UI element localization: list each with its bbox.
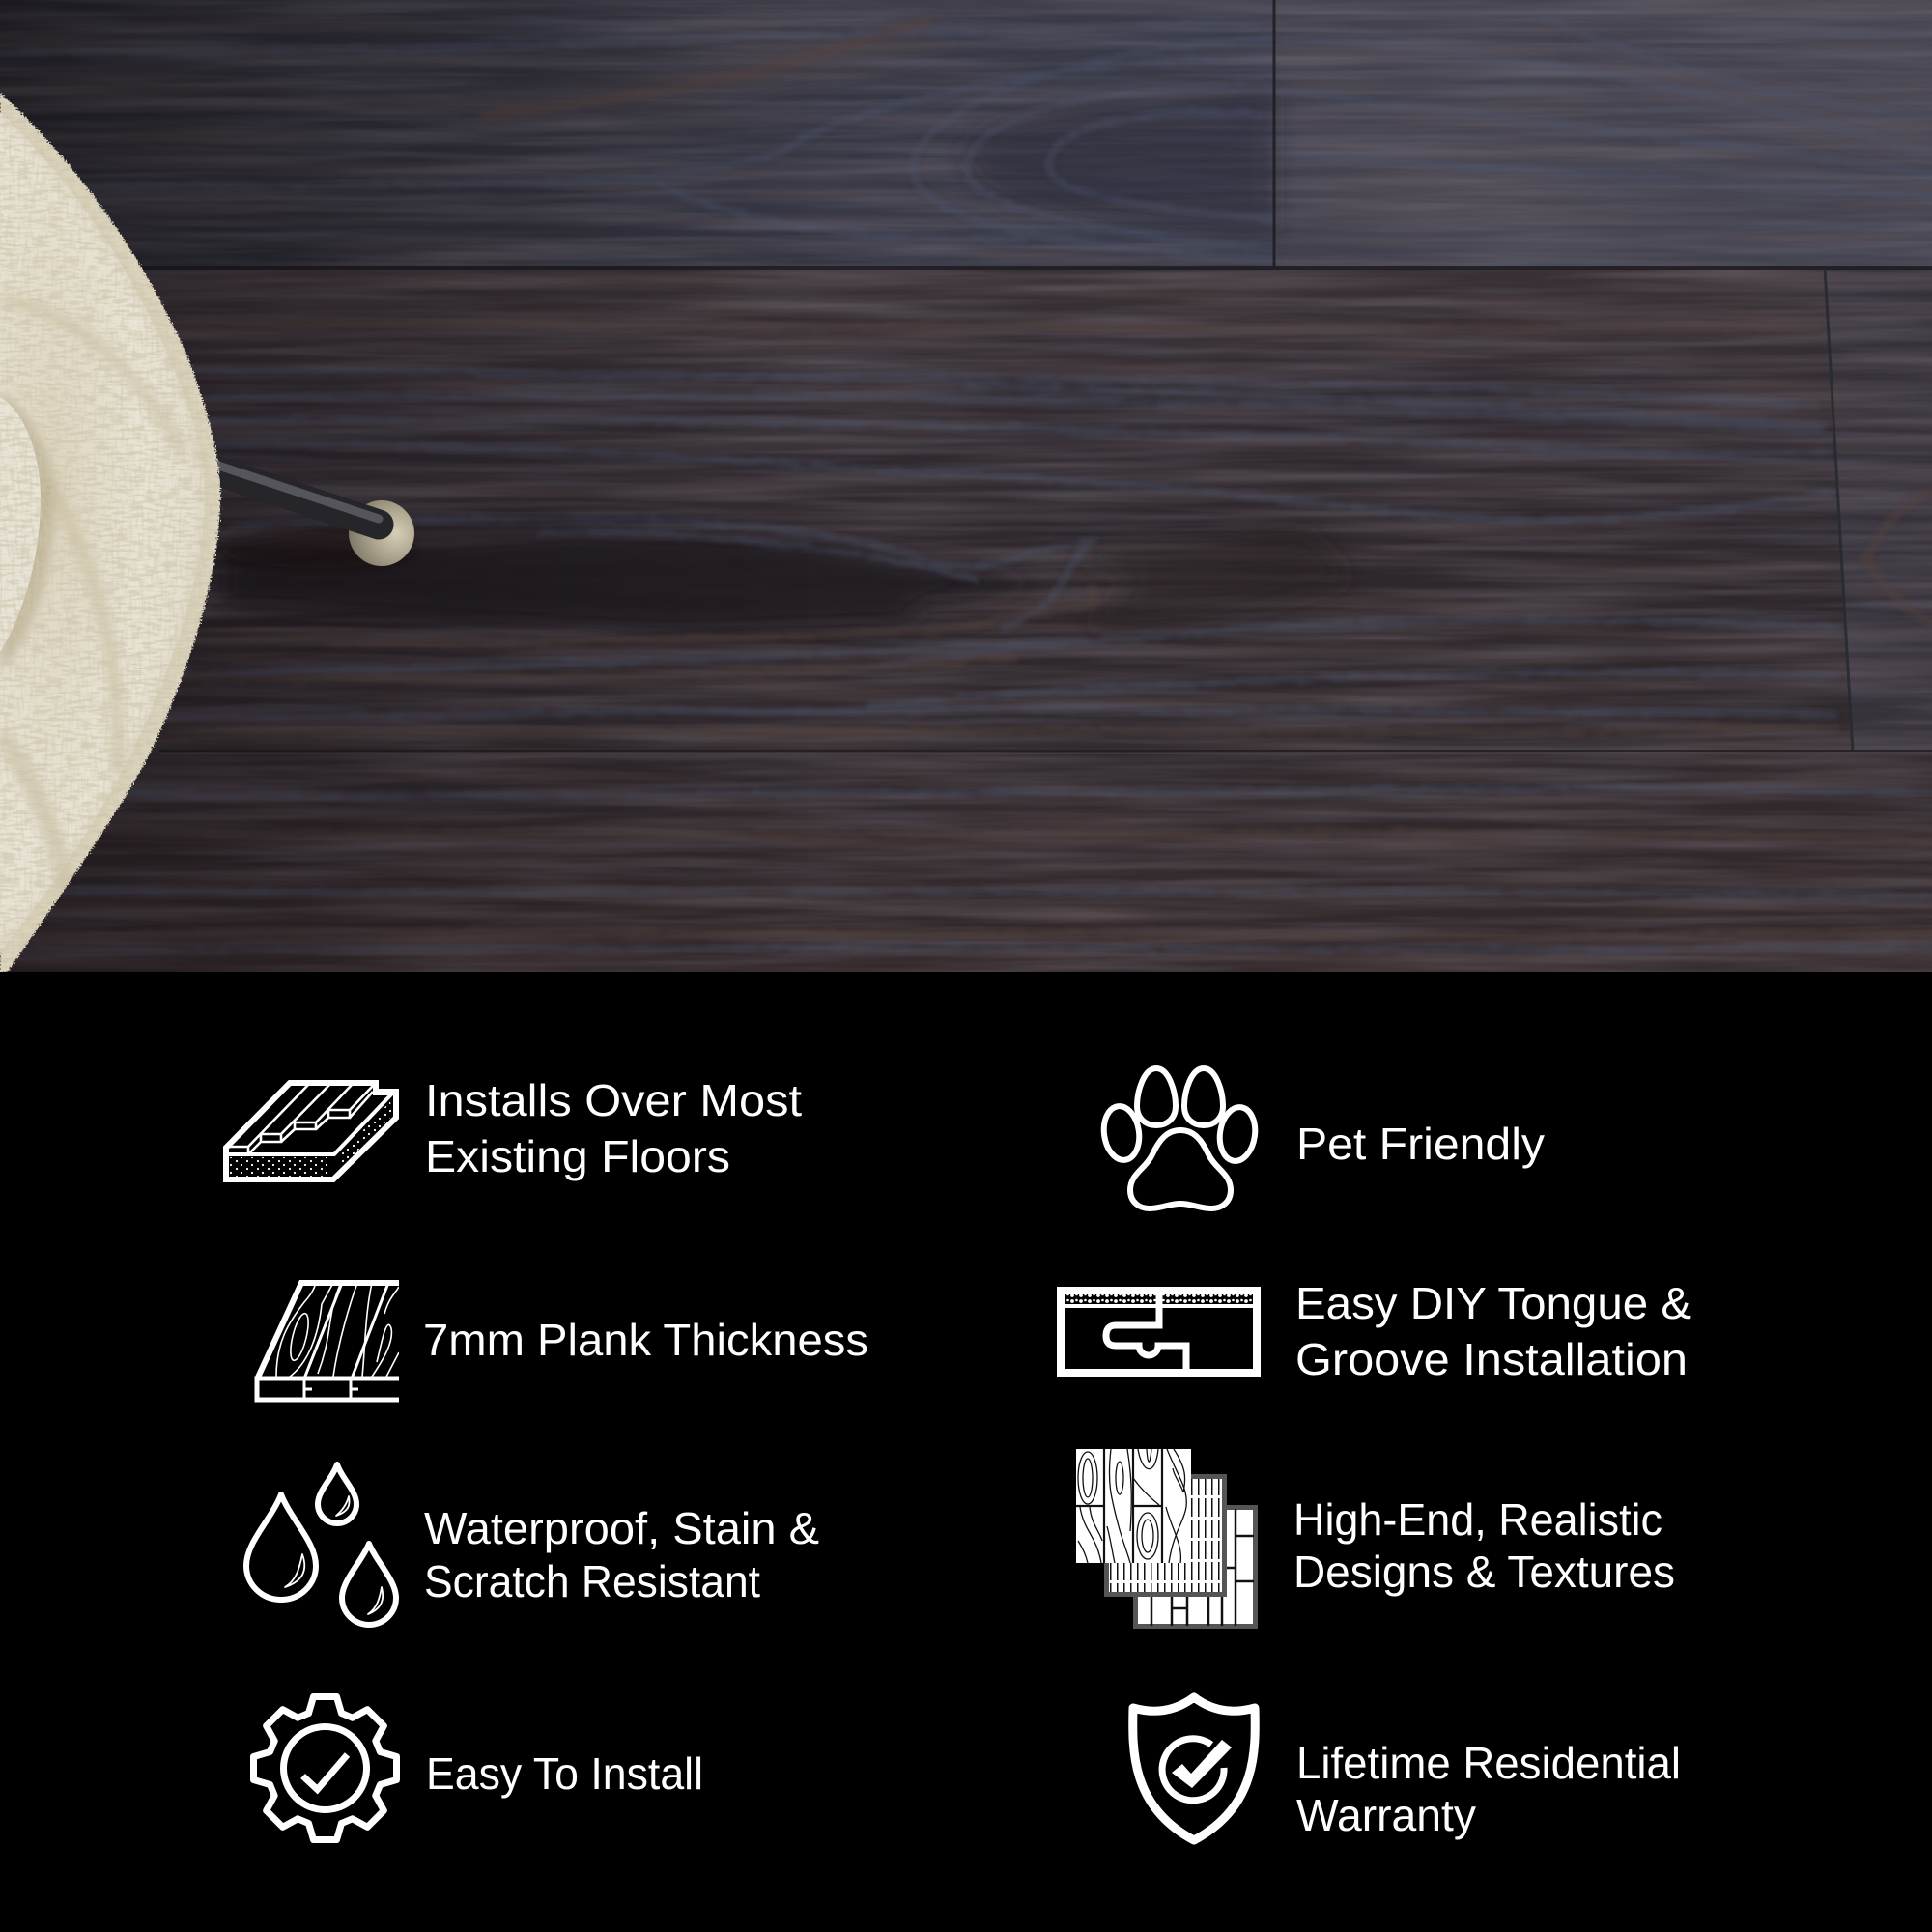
text: installs over most existing floors: Installs Over Most (425, 1075, 802, 1125)
chair seat (0, 87, 227, 976)
feature: easy DIY tongue and groove installation (1061, 1278, 1691, 1384)
panel: features list (226, 1068, 1691, 1840)
feature: 7mm plank thickness (257, 1283, 868, 1400)
text: installs over most existing floors: Existing Floors (425, 1131, 730, 1181)
feature: high-end realistic designs and textures (1076, 1449, 1675, 1627)
chair foot (349, 500, 414, 566)
text: lifetime residential warranty: Lifetime Residential (1296, 1738, 1681, 1788)
text: easy DIY tongue and groove installation: Easy DIY Tongue & (1295, 1278, 1691, 1328)
feature: installs over most existing floors (226, 1075, 802, 1181)
text: high-end realistic designs and textures (1293, 1494, 1675, 1597)
text: lifetime residential warranty (1296, 1738, 1681, 1840)
text: waterproof, stain and scratch resistant: Waterproof, Stain & (424, 1503, 819, 1553)
plank seams (126, 0, 1932, 753)
text: waterproof, stain and scratch resistant: Scratch Resistant (424, 1556, 760, 1606)
feature: waterproof, stain and scratch resistant (246, 1464, 819, 1625)
text: easy DIY tongue and groove installation (1295, 1278, 1691, 1384)
text: installs over most existing floors (425, 1075, 802, 1181)
feature: lifetime residential warranty (1133, 1697, 1681, 1840)
darker left side of floor (0, 0, 634, 972)
icon: paw print (1100, 1068, 1259, 1208)
text: pet friendly: Pet Friendly (1296, 1119, 1545, 1169)
text: 7mm plank thickness: 7mm Plank Thickness (423, 1315, 868, 1365)
icon: layered floor block (226, 1083, 396, 1179)
icon: water drops (246, 1464, 396, 1625)
text: high-end realistic designs and textures: High-End, Realistic (1293, 1494, 1662, 1545)
text: high-end realistic designs and textures: Designs & Textures (1293, 1547, 1675, 1597)
text: lifetime residential warranty: Warranty (1296, 1790, 1476, 1840)
icon: stacked wood samples (1076, 1449, 1256, 1627)
floor planks (0, 0, 1932, 972)
chair leg shadow (222, 533, 415, 568)
text: waterproof, stain and scratch resistant (424, 1503, 819, 1606)
icon: tongue and groove joint (1061, 1288, 1257, 1377)
feature: pet friendly (1100, 1068, 1545, 1208)
chair leg (218, 466, 379, 525)
photo: dark wood floor with cream chair (0, 0, 1932, 976)
text: easy to install: Easy To Install (426, 1748, 703, 1799)
icon: gear with check mark (253, 1696, 396, 1839)
feature: easy to install (253, 1696, 703, 1839)
wood grain lines (0, 19, 1932, 952)
icon: wood plank (257, 1283, 412, 1400)
icon: shield with check mark (1133, 1697, 1255, 1840)
text: easy DIY tongue and groove installation: Groove Installation (1295, 1334, 1688, 1384)
